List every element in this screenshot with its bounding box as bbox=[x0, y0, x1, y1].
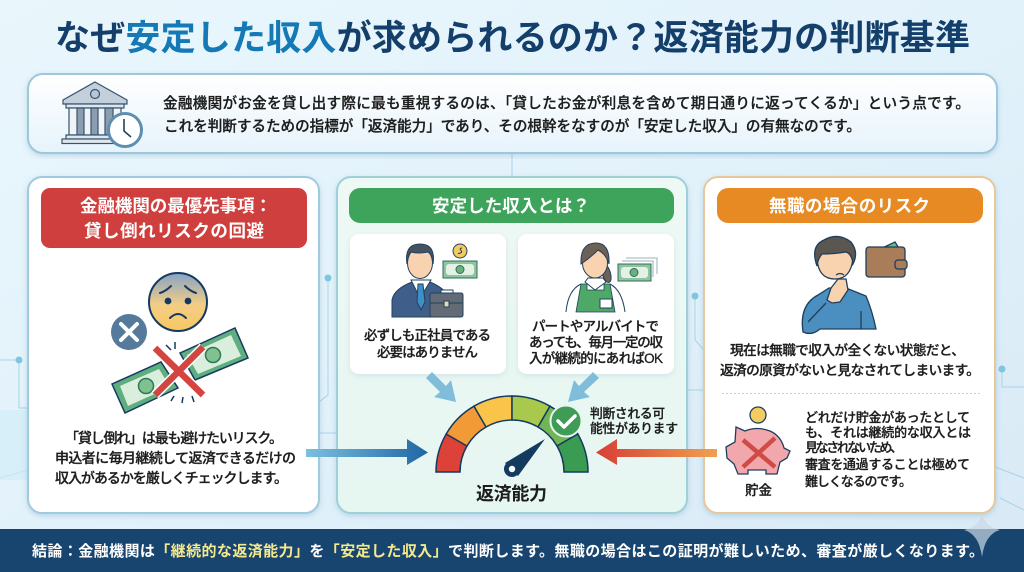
heading: lending risk bbox=[41, 188, 307, 248]
arrow: blue to gauge bbox=[306, 439, 428, 465]
card: part-time worker: パートやアルバイトで bbox=[532, 319, 659, 334]
icon: sparkle bbox=[964, 513, 1000, 557]
unemployed text: 現在は無職で収入が全くない状態だと、 bbox=[730, 342, 965, 358]
panel: introduction bbox=[28, 74, 997, 153]
unemployed text bbox=[720, 342, 980, 378]
savings text: 審査を通過することは極めて bbox=[805, 457, 970, 472]
gauge note: 判断される可 bbox=[590, 406, 665, 421]
heading: unemployed risk bbox=[717, 188, 983, 223]
icon: part-time worker bbox=[566, 243, 657, 312]
heading: lending risk: 貸し倒れリスクの回避 bbox=[84, 221, 264, 241]
heading: lending risk: 金融機関の最優先事項： bbox=[80, 196, 272, 216]
intro text: 金融機関がお金を貸し出す際に最も重視するのは、「貸したお金が利息を含めて期日通りに返ってくるか」という点です。 bbox=[163, 94, 970, 112]
savings text: 難しくなるのです。 bbox=[805, 474, 912, 489]
heading: unemployed risk: 無職の場合のリスク bbox=[769, 196, 930, 216]
heading: stable income bbox=[349, 188, 674, 223]
savings text bbox=[805, 410, 971, 489]
gauge note: 能性があります bbox=[590, 421, 678, 436]
icon: check mark bbox=[550, 406, 582, 436]
lending risk text bbox=[55, 430, 296, 486]
title: なぜ安定した収入が求められるのか？返済能力の判断基準 bbox=[55, 19, 970, 58]
arrow: orange to gauge bbox=[596, 439, 717, 465]
lending risk text: 申込者に毎月継続して返済できるだけの bbox=[55, 450, 296, 466]
conclusion bar bbox=[0, 529, 1024, 572]
conclusion bar: 結論：金融機関は「継続的な返済能力」を「安定した収入」で判断します。無職の場合はこの証明が難しいため、審査が厳しくなります。 bbox=[32, 542, 984, 560]
icon: piggy bank bbox=[726, 407, 790, 474]
intro text: これを判断するための指標が「返済能力」であり、その根幹をなすのが「安定した収入」の有無なのです。 bbox=[164, 117, 861, 135]
icon: cross badge bbox=[111, 314, 147, 350]
card: part-time worker: あっても、毎月一定の収 bbox=[529, 335, 664, 350]
chart: repayment gauge bbox=[436, 396, 588, 477]
lending risk text: 「貸し倒れ」は最も避けたいリスク。 bbox=[65, 430, 283, 446]
icon: worried man bbox=[802, 236, 907, 333]
card: full-time employee: 必要はありません bbox=[377, 345, 478, 360]
savings text: も、それは継続的な収入とは bbox=[805, 425, 971, 440]
card: part-time worker bbox=[518, 234, 674, 374]
card: part-time worker: 入が継続的にあればOK bbox=[529, 350, 663, 366]
icon: torn banknote bbox=[112, 328, 248, 413]
unemployed text: 返済の原資がないと見なされてしまいます。 bbox=[720, 362, 980, 378]
arrow: worker to gauge bbox=[568, 372, 599, 402]
icon: worried face bbox=[149, 273, 207, 331]
card: full-time employee: 必ずしも正社員である bbox=[364, 328, 491, 343]
panel: lending risk bbox=[28, 177, 319, 513]
panel: unemployed risk bbox=[704, 177, 995, 513]
panel: stable income bbox=[337, 177, 687, 513]
arrow: employee to gauge bbox=[426, 372, 456, 402]
gauge note bbox=[590, 406, 678, 436]
savings label: 貯金 bbox=[745, 483, 772, 498]
gauge label: 返済能力 bbox=[476, 484, 547, 504]
gauge needle bbox=[504, 439, 545, 477]
card: full-time employee bbox=[350, 234, 506, 374]
icon: bank and clock bbox=[62, 82, 142, 146]
savings text: 見なされないため、 bbox=[805, 440, 903, 455]
icon: businessman bbox=[392, 244, 477, 317]
savings text: どれだけ貯金があったとして bbox=[805, 410, 970, 425]
intro text bbox=[163, 94, 970, 135]
heading: stable income: 安定した収入とは？ bbox=[432, 196, 590, 216]
lending risk text: 収入があるかを厳しくチェックします。 bbox=[55, 470, 288, 486]
